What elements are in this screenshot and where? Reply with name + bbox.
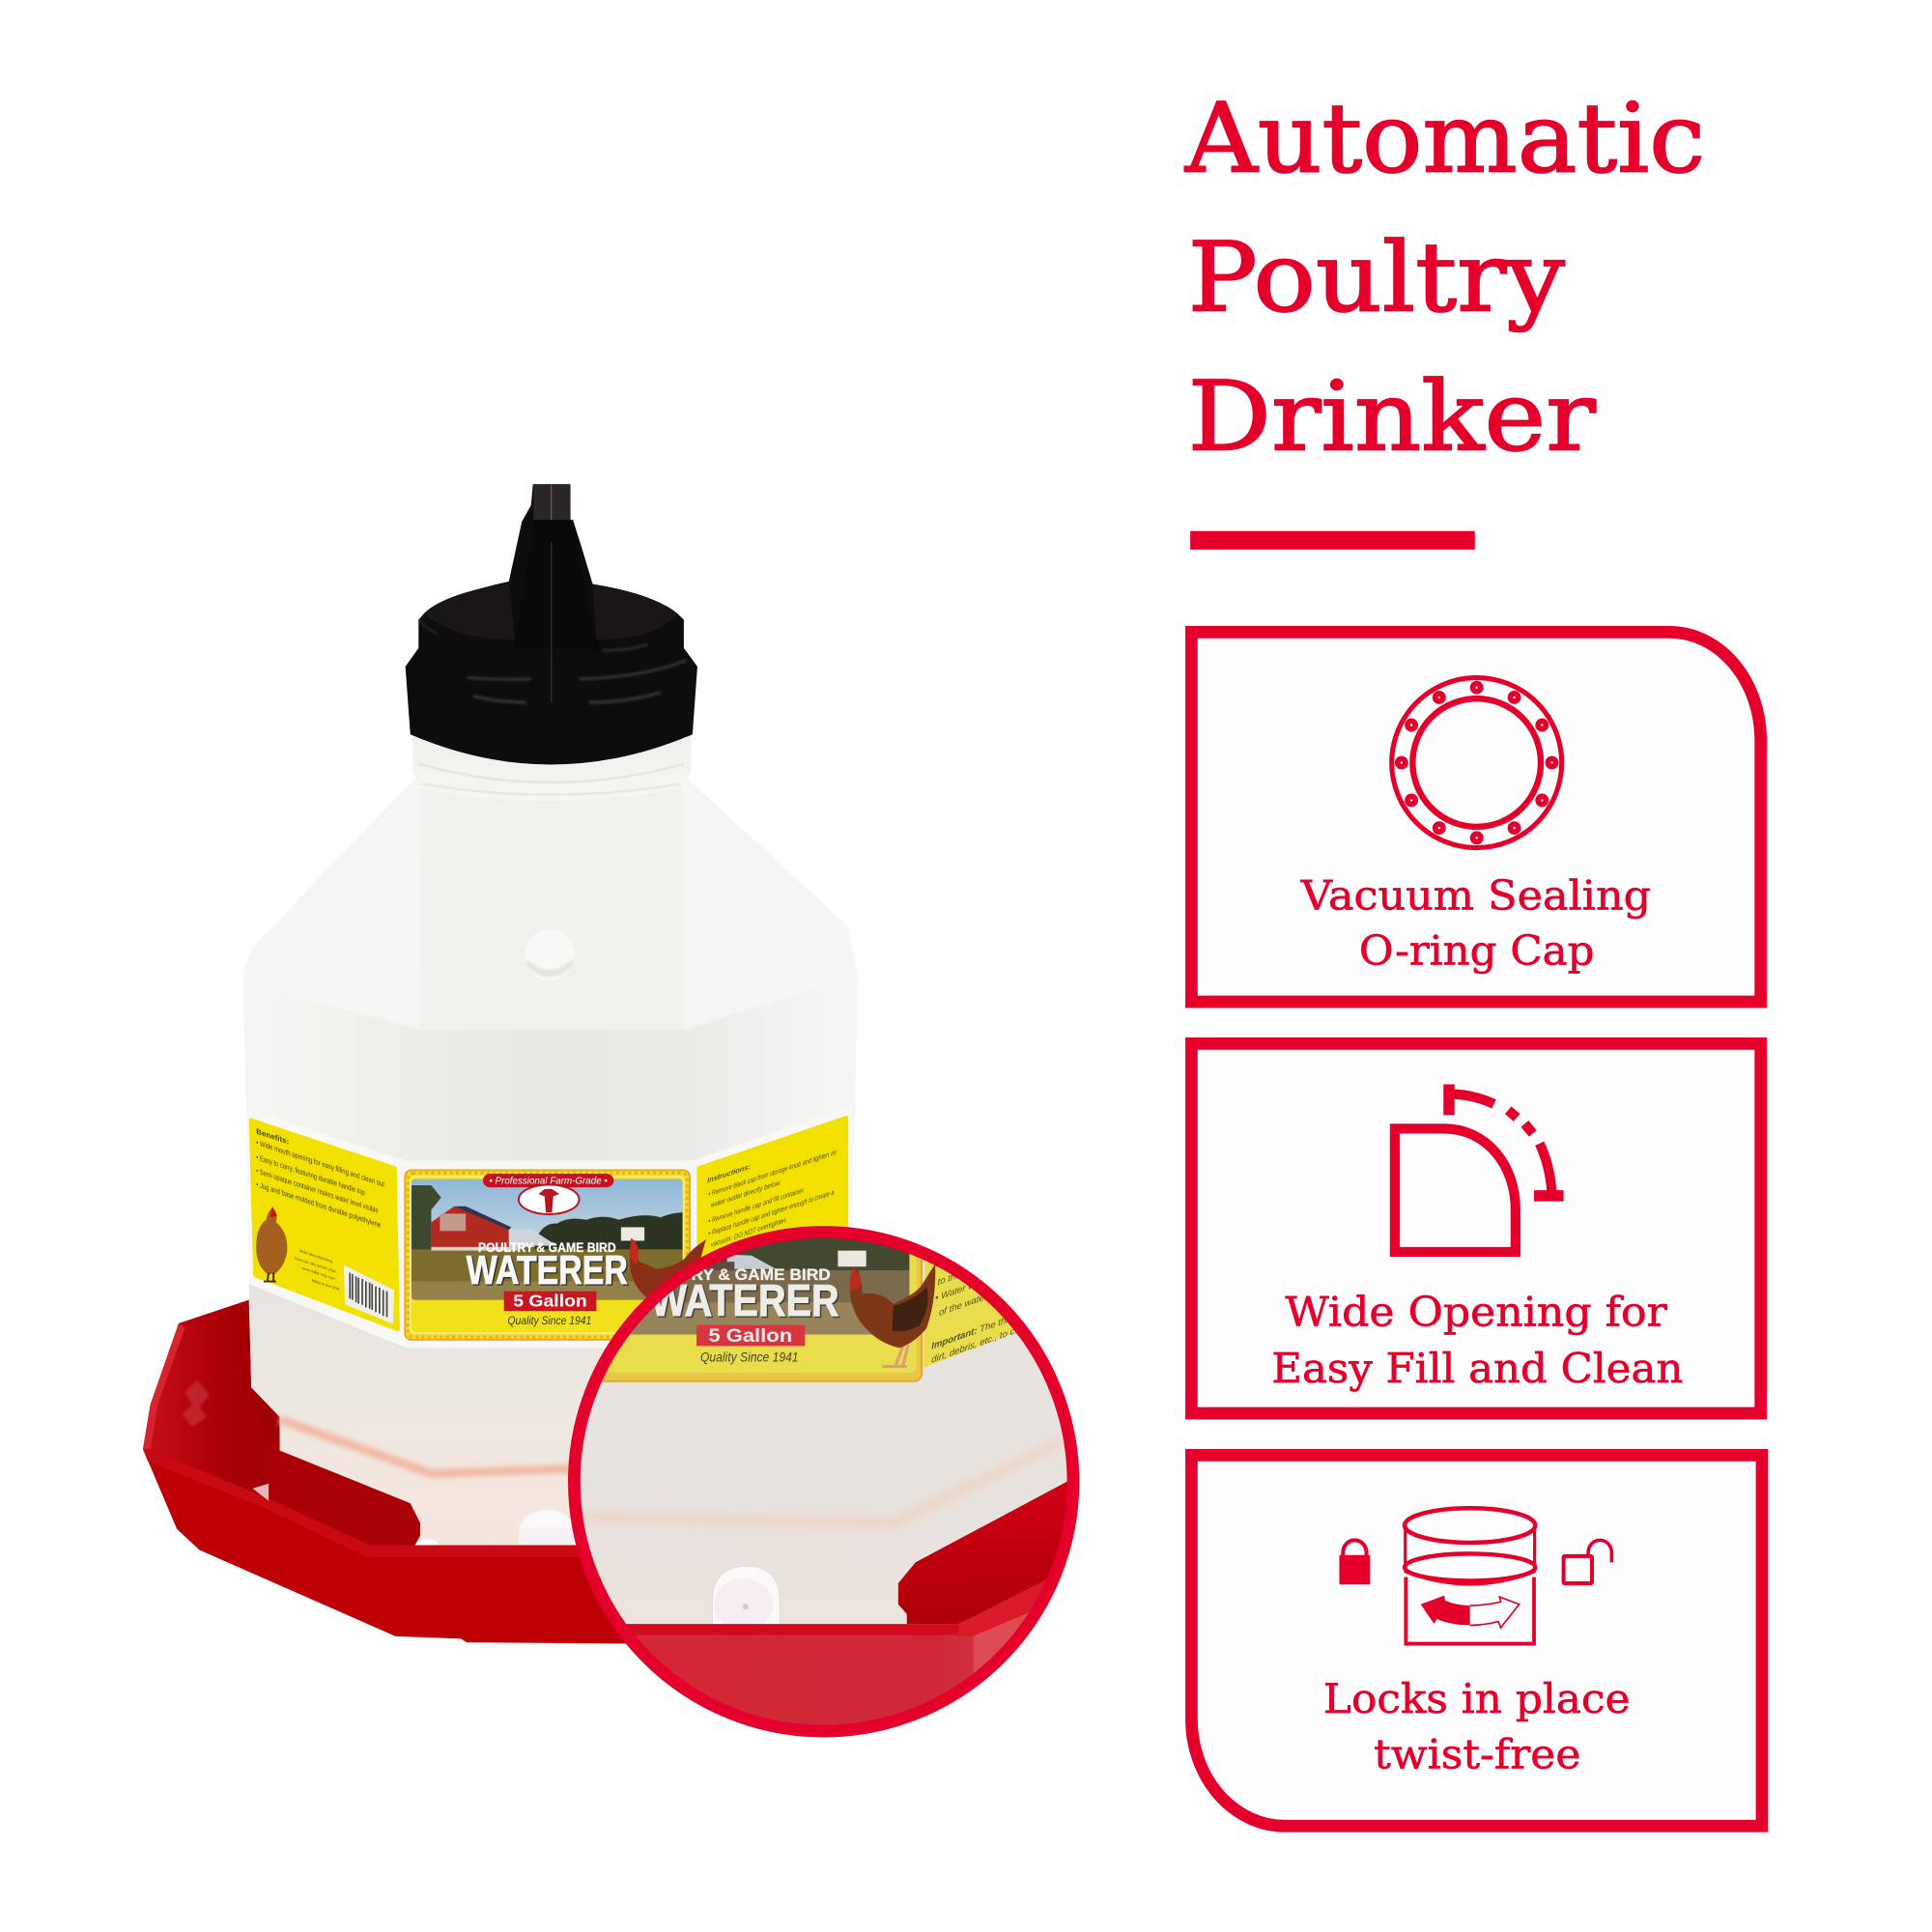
bottle neck <box>412 727 692 801</box>
panel text: Vacuum Sealing <box>1300 871 1651 919</box>
side label: benefits: • Semi opaque container makes water level visible <box>256 1166 379 1215</box>
red tray back wall <box>143 1300 281 1552</box>
title: Poultry <box>1188 222 1565 333</box>
label backing band <box>246 1105 853 1348</box>
product photo: poultry drinker <box>143 484 863 1644</box>
magnified right label: • Remove <box>935 1247 976 1272</box>
magnified right label: to the <box>938 1269 961 1288</box>
magnified detail circle <box>568 1226 1080 1737</box>
magnified tray <box>898 1482 1067 1673</box>
red tray front <box>143 1444 640 1644</box>
magnified right label: Important: The threads <box>931 1308 1029 1352</box>
panel: wide opening <box>1191 1043 1761 1413</box>
side label: benefits: www.miller-mfg.com <box>301 1265 335 1281</box>
title <box>1184 83 1705 473</box>
side label: instructions: water outlet directly below. <box>711 1178 781 1209</box>
side label: benefits: • Wide mouth opening for easy filling and clean out <box>256 1138 384 1189</box>
magnified front label: 5 Gallon <box>708 1326 792 1347</box>
front label <box>405 1170 706 1340</box>
rooster on label <box>630 1238 706 1303</box>
panel: vacuum sealing <box>1191 632 1761 1002</box>
front label: 5 Gallon <box>513 1292 587 1311</box>
title underline <box>1190 531 1475 550</box>
magnified front label: Quality Since 1941 <box>700 1350 799 1364</box>
magnified right label: dirt, debris, etc., to create a <box>931 1316 1044 1366</box>
panel text: twist-free <box>1374 1730 1580 1777</box>
side label: benefits: Glencoe, MN 55336 USA <box>295 1256 336 1274</box>
panel text <box>1323 1675 1631 1777</box>
magnified right label: • Water will flow <box>935 1270 1001 1304</box>
side label: instructions: • Remove black cap from storage knob and tighten on <box>708 1148 837 1198</box>
side label: instructions: vacuum. DO NOT overtighten. <box>711 1215 787 1249</box>
side label: instructions: • Replace handle cap and tighten enough to create a <box>708 1188 835 1237</box>
magnified front label: WATERER <box>650 1275 839 1325</box>
front label: WATERER <box>467 1247 628 1293</box>
magnified bottle base <box>582 1435 1065 1725</box>
magnified front label <box>601 1238 935 1382</box>
icon: closed lock <box>1339 1540 1370 1584</box>
panel text: O-ring Cap <box>1359 927 1595 975</box>
side label: benefits: • Jug and base molded from durable polyethylene <box>256 1179 381 1230</box>
side label: instructions <box>698 1118 846 1257</box>
title: Drinker <box>1188 362 1596 473</box>
panel text: Locks in place <box>1323 1675 1631 1722</box>
panel text <box>1300 871 1651 975</box>
front label: Quality Since 1941 <box>508 1314 591 1327</box>
side label: benefits: • Easy to carry, featuring durable handle top <box>256 1152 365 1197</box>
icon: open lock <box>1564 1540 1611 1583</box>
icon: twist cylinder <box>1405 1508 1535 1644</box>
side label: benefits: Miller Manufacturing <box>299 1248 332 1264</box>
magnifier ring <box>574 1233 1073 1731</box>
front label: POULTRY & GAME BIRD <box>478 1240 616 1255</box>
black cap with handle <box>406 484 697 764</box>
side label: instructions: • Remove handle cap and fill container. <box>708 1185 805 1226</box>
panel text <box>1271 1288 1683 1392</box>
barcode <box>344 1264 394 1324</box>
panel text: Easy Fill and Clean <box>1271 1345 1683 1392</box>
bottle body <box>242 774 863 1555</box>
cap top flats <box>424 582 678 639</box>
magnified right label: of the water out <box>939 1286 1004 1319</box>
icon: wide opening <box>1395 1084 1564 1252</box>
title: Automatic <box>1184 83 1705 194</box>
front label: • Professional Farm-Grade • <box>489 1177 608 1187</box>
magnified right label <box>923 1260 1016 1368</box>
magnified front label: POULTRY & GAME BIRD <box>636 1265 831 1284</box>
magnified filler knob <box>713 1567 780 1624</box>
side label: instructions: Instructions: <box>707 1162 751 1184</box>
side knob <box>525 929 574 980</box>
chicken illustration <box>256 1207 287 1282</box>
side label: benefits <box>251 1120 398 1329</box>
magnified rooster <box>850 1264 935 1367</box>
side label: benefits: Benefits: <box>256 1127 289 1147</box>
side label: benefits: Made in the USA <box>312 1278 340 1292</box>
filler knob <box>519 1508 576 1548</box>
panel text: Wide Opening for <box>1285 1288 1668 1335</box>
icon: o-ring cap <box>1392 678 1562 848</box>
panel: locks twist-free <box>1191 1455 1762 1826</box>
